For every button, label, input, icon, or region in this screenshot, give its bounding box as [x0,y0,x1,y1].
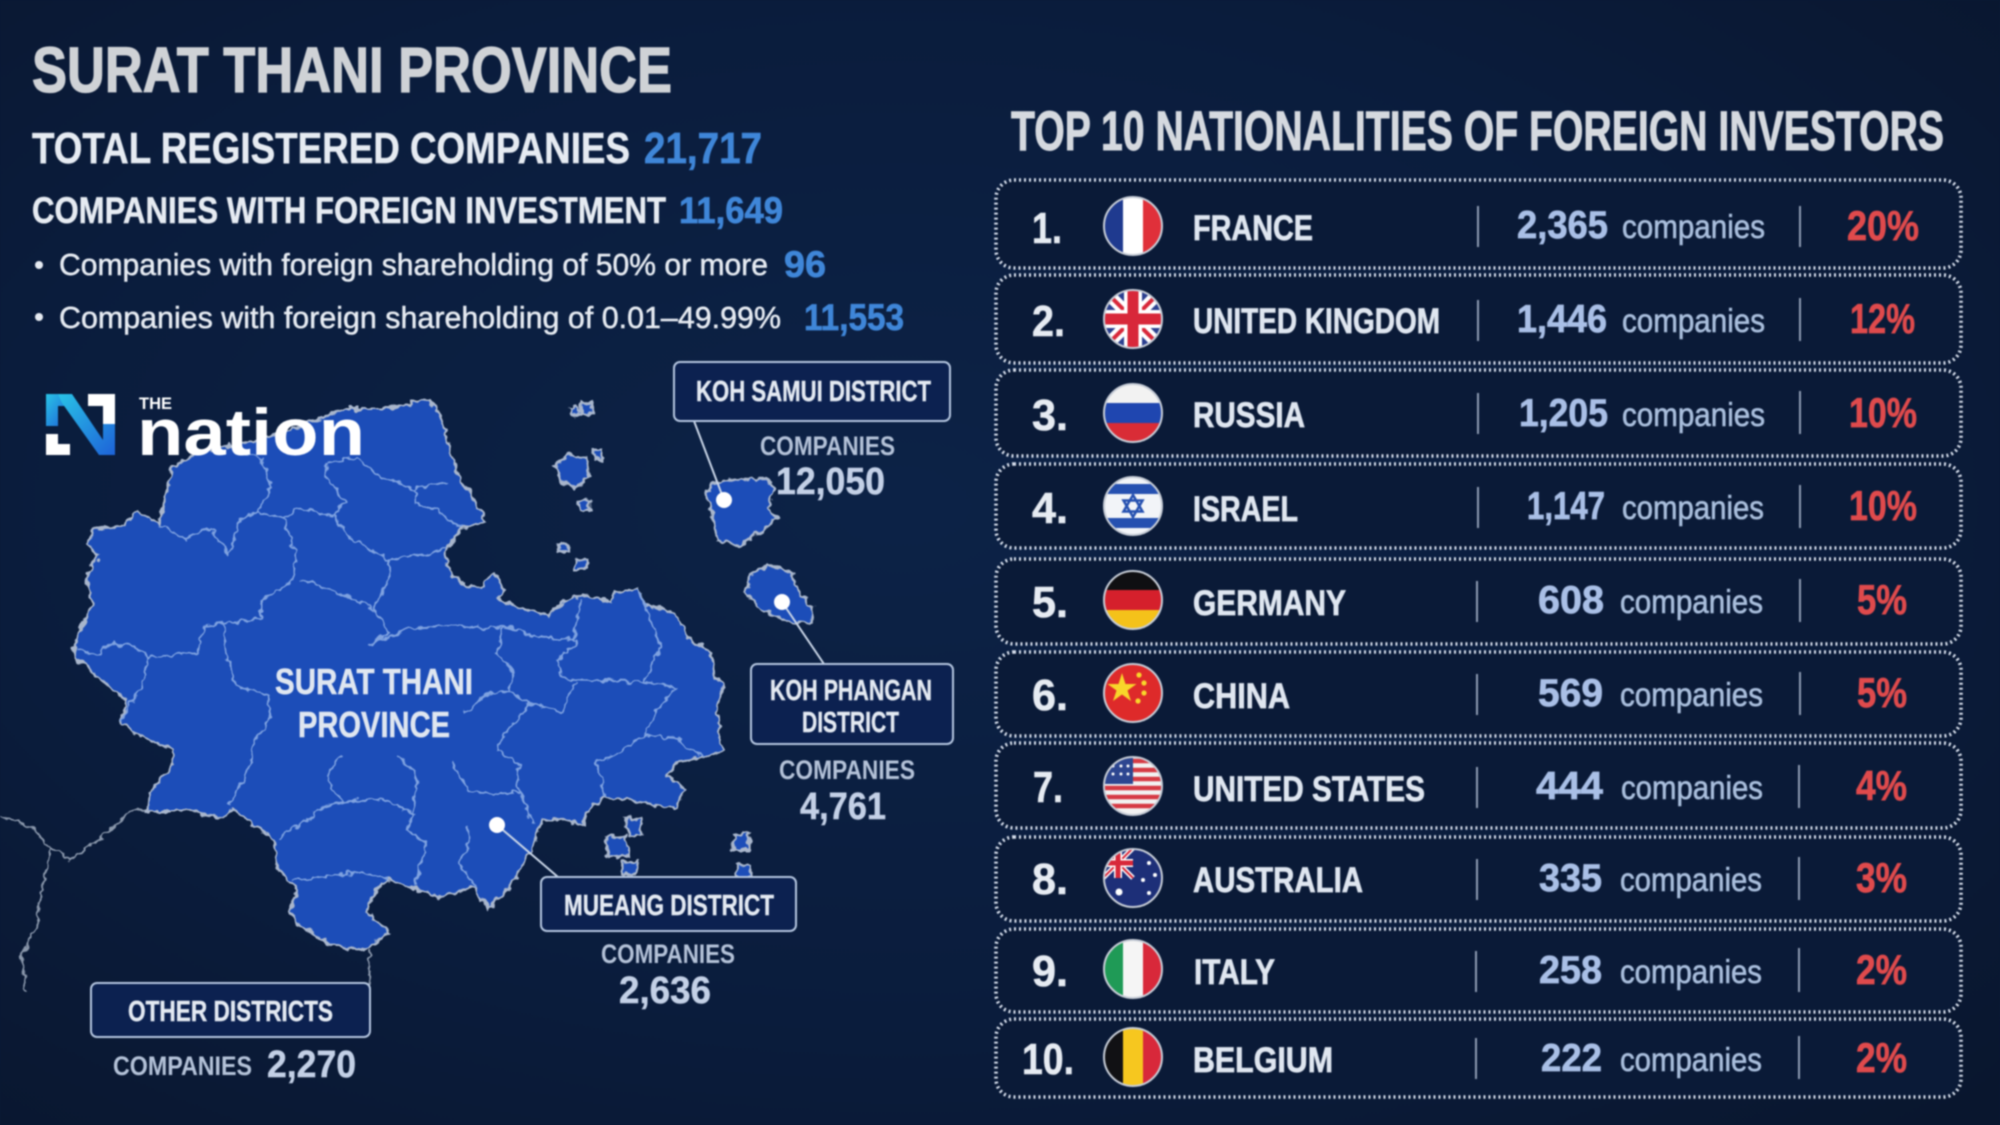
callout: Mueang District: 2,636 [619,970,711,1012]
row 8: Australia: 335 [1539,857,1602,900]
row 8: Australia [996,837,1961,921]
row 1: France: 2,365 [1517,204,1608,247]
row 4: Israel: 4. [1032,484,1068,533]
row 8: Australia: companies [1620,861,1762,898]
flag: Italy [1103,939,1163,999]
row 5: Germany: 608 [1538,579,1604,622]
row 6: China: 5% [1857,669,1907,716]
row 9: Italy: ITALY [1194,953,1275,992]
flag: Germany [1103,570,1163,630]
map label: Surat Thani Province: PROVINCE [298,704,450,745]
row 7: United States [996,743,1961,828]
callout: Mueang District: MUEANG DISTRICT [564,890,774,922]
row 9: Italy: companies [1620,953,1762,990]
row 4: Israel [996,464,1961,548]
flag: Belgium [1103,1027,1163,1087]
logo: The Nation [46,394,365,469]
callout: Mueang District [489,817,796,1012]
row 9: Italy: 258 [1539,949,1602,992]
row 3: Russia: 1,205 [1519,392,1608,435]
row 8: Australia: AUSTRALIA [1193,861,1363,900]
callout: Other Districts: OTHER DISTRICTS [128,996,333,1028]
callout: Koh Samui District: KOH SAMUI DISTRICT [696,376,931,408]
callout: Other Districts [91,983,370,1086]
row 2: United Kingdom: 2. [1032,297,1065,346]
callout: Mueang District: COMPANIES [601,939,735,969]
row 10: Belgium: 2% [1856,1034,1907,1081]
row 2: United Kingdom [996,275,1961,363]
row 7: United States: 444 [1536,765,1603,808]
stat: companies with foreign investment: 11,649 [679,190,783,231]
row 6: China: 569 [1538,672,1603,715]
flag: China [1103,663,1163,723]
row 4: Israel: 1,147 [1527,485,1605,528]
row 8: Australia: 8. [1032,855,1068,904]
row 5: Germany: 5. [1032,578,1068,627]
row 3: Russia: 3. [1032,391,1068,440]
map label: Surat Thani Province: SURAT THANI [275,661,473,702]
row 5: Germany: GERMANY [1193,584,1346,623]
callout: Other Districts: COMPANIES [113,1051,252,1081]
logo: The Nation: THE [139,394,172,413]
row 7: United States: companies [1621,769,1763,806]
row 3: Russia [996,370,1961,456]
row 7: United States: 4% [1856,762,1907,809]
row 2: United Kingdom: companies [1622,302,1765,339]
row 3: Russia: RUSSIA [1193,396,1305,435]
row 6: China: 6. [1032,671,1068,720]
row 9: Italy: 9. [1032,947,1068,996]
row 5: Germany: companies [1620,583,1763,620]
row 1: France: 1. [1032,204,1062,253]
row 9: Italy: 2% [1856,946,1907,993]
row 10: Belgium: 10. [1022,1035,1074,1084]
callout: Koh Phangan District [751,594,953,828]
row 1: France: FRANCE [1193,209,1313,248]
row 5: Germany [996,559,1961,644]
callout: Koh Samui District: 12,050 [776,461,885,503]
callout: Koh Samui District: COMPANIES [760,431,895,461]
row 10: Belgium: 222 [1541,1037,1602,1080]
logo: The Nation: nation [137,395,365,469]
flag: France [1103,196,1163,256]
row 10: Belgium: companies [1620,1041,1762,1078]
row 10: Belgium: BELGIUM [1193,1041,1333,1080]
row 8: Australia: 3% [1856,854,1907,901]
row 4: Israel: companies [1622,489,1764,526]
flag: United Kingdom [1103,289,1163,349]
map label: Surat Thani Province [275,661,473,745]
row 1: France: 20% [1847,202,1919,249]
row 6: China: companies [1620,676,1763,713]
row 2: United Kingdom: 12% [1850,295,1915,342]
stat: companies with foreign investment: COMPANIES WITH FOREIGN INVESTMENT [32,190,666,231]
row 6: China [996,652,1961,736]
row 3: Russia: 10% [1849,389,1917,436]
stat: total registered companies: 21,717 [644,124,762,173]
callout: Koh Phangan District: KOH PHANGAN [770,675,932,707]
map: Surat Thani province [0,399,813,992]
callout: Koh Phangan District: COMPANIES [779,755,915,785]
flag: Australia [1103,848,1163,908]
callout: Koh Phangan District: 4,761 [800,786,886,828]
bullet: 50% or more: Companies with foreign shareholding of 50% or more [59,247,768,282]
row 4: Israel: ISRAEL [1193,490,1298,529]
row 1: France: companies [1622,208,1765,245]
flag: Israel [1103,476,1163,536]
callout: Koh Samui District [674,362,950,508]
row 3: Russia: companies [1622,396,1765,433]
row 4: Israel: 10% [1849,482,1917,529]
row 7: United States: UNITED STATES [1193,770,1425,809]
row 2: United Kingdom: 1,446 [1517,298,1607,341]
bullet: 0.01-49.99%: 11,553 [804,297,904,338]
row 5: Germany: 5% [1857,576,1907,623]
bullet: 50% or more: 96 [784,244,826,285]
title: SURAT THANI PROVINCE [32,34,672,106]
callout: Other Districts: 2,270 [267,1044,356,1086]
stat: total registered companies: TOTAL REGISTERED COMPANIES [32,124,630,173]
row 1: France [996,180,1961,268]
row 10: Belgium [996,1019,1961,1097]
bullet: 0.01-49.99%: Companies with foreign shareholding of 0.01–49.99% [59,300,781,335]
flag: United States [1103,756,1163,816]
table: nationalities ranking [996,180,1961,1097]
row 9: Italy [996,929,1961,1012]
row 2: United Kingdom: UNITED KINGDOM [1193,302,1440,341]
flag: Russia [1103,383,1163,443]
row 6: China: CHINA [1193,677,1290,716]
callout: Koh Phangan District: DISTRICT [802,707,899,739]
row 7: United States: 7. [1033,763,1063,812]
